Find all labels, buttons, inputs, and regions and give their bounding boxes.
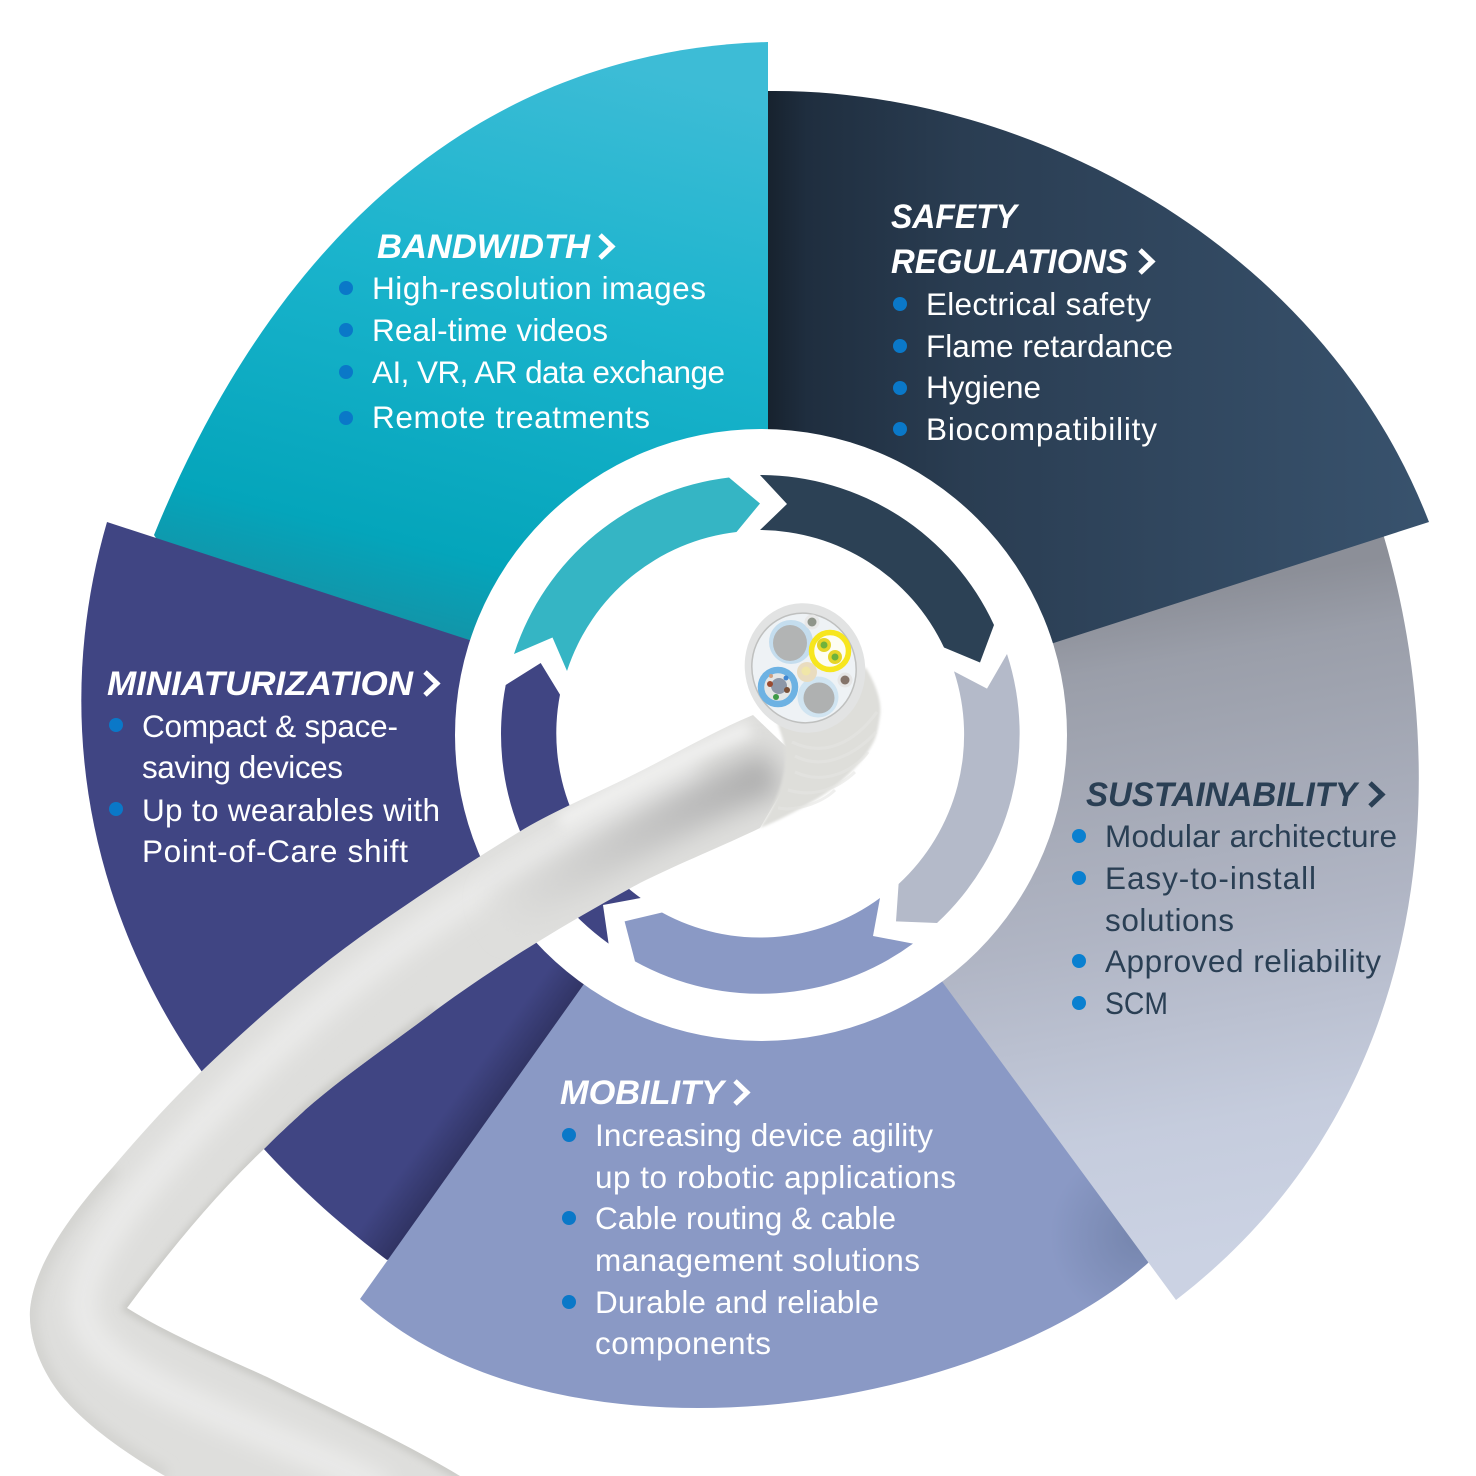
list: miniaturization: [109, 708, 440, 869]
arrow: dark navy: [760, 475, 994, 662]
list: miniaturization: saving devices: [142, 749, 343, 785]
list: sustainability: [1072, 818, 1397, 1021]
head texture lines: [778, 712, 877, 809]
list: miniaturization: Point-of-Care shift: [142, 833, 408, 869]
heading: safety regulations: REGULATIONS: [891, 243, 1128, 281]
list: mobility: components: [595, 1325, 771, 1361]
list: sustainability: SCM: [1105, 985, 1168, 1021]
wedge: safety regulations: [768, 91, 1429, 735]
yellow sub-cable: [812, 632, 848, 670]
blue sub-cable: [761, 670, 795, 704]
list: mobility: management solutions: [595, 1242, 920, 1278]
wedge: miniaturization: [81, 522, 761, 1260]
heading: sustainability: SUSTAINABILITY: [1086, 776, 1360, 814]
heading: mobility: MOBILITY: [560, 1074, 727, 1112]
small strand: right: [838, 672, 852, 688]
arrow: periwinkle: [625, 898, 913, 994]
panel: miniaturization: [81, 522, 761, 1260]
list: safety regulations: Biocompatibility: [926, 411, 1157, 447]
panel: bandwidth: [154, 42, 768, 735]
panel: sustainability: [761, 520, 1419, 1300]
list: mobility: [562, 1117, 956, 1361]
heading: miniaturization: MINIATURIZATION: [107, 665, 414, 703]
list: sustainability: Approved reliability: [1105, 943, 1381, 979]
list: safety regulations: [893, 286, 1173, 447]
list: mobility: Cable routing & cable: [595, 1200, 896, 1236]
list: sustainability: solutions: [1105, 902, 1234, 938]
cycle of arrows: [501, 475, 1020, 994]
list: bandwidth: Real-time videos: [372, 312, 608, 348]
central white circle: [455, 429, 1067, 1041]
list: sustainability: Easy-to-install: [1105, 860, 1316, 896]
list: bandwidth: Remote treatments: [372, 399, 650, 435]
central strand: [797, 662, 817, 682]
cable end face: [731, 590, 879, 746]
list: miniaturization: Up to wearables with: [142, 792, 440, 828]
list: safety regulations: Electrical safety: [926, 286, 1151, 322]
list: sustainability: Modular architecture: [1105, 818, 1397, 854]
list: miniaturization: Compact & space-: [142, 708, 398, 744]
list: bandwidth: High-resolution images: [372, 270, 706, 306]
list: bandwidth: [339, 270, 725, 435]
cable head body: [760, 668, 880, 828]
heading: safety regulations: [891, 198, 1152, 281]
arrow: teal: [514, 478, 760, 671]
lumen: top: [769, 620, 813, 664]
small strand: top: [804, 614, 820, 630]
arrow: grey: [896, 654, 1020, 923]
list: safety regulations: Hygiene: [926, 369, 1041, 405]
wedge: mobility: [360, 735, 1165, 1408]
wedge: bandwidth: [154, 42, 768, 735]
heading: safety regulations: SAFETY: [891, 198, 1020, 236]
lumen: bottom: [798, 676, 838, 718]
panel: mobility: [360, 735, 1165, 1408]
cable tube: [30, 715, 786, 1476]
list: mobility: Durable and reliable: [595, 1284, 879, 1320]
list: safety regulations: Flame retardance: [926, 328, 1173, 364]
heading: bandwidth: BANDWIDTH: [377, 228, 591, 266]
wedge: sustainability: [761, 520, 1419, 1300]
panel: safety regulations: [768, 91, 1429, 735]
arrow: indigo: [501, 663, 641, 944]
list: mobility: Increasing device agility: [595, 1117, 933, 1153]
cable: [0, 590, 900, 1476]
list: mobility: up to robotic applications: [595, 1159, 956, 1195]
list: bandwidth: AI, VR, AR data exchange: [372, 354, 725, 390]
